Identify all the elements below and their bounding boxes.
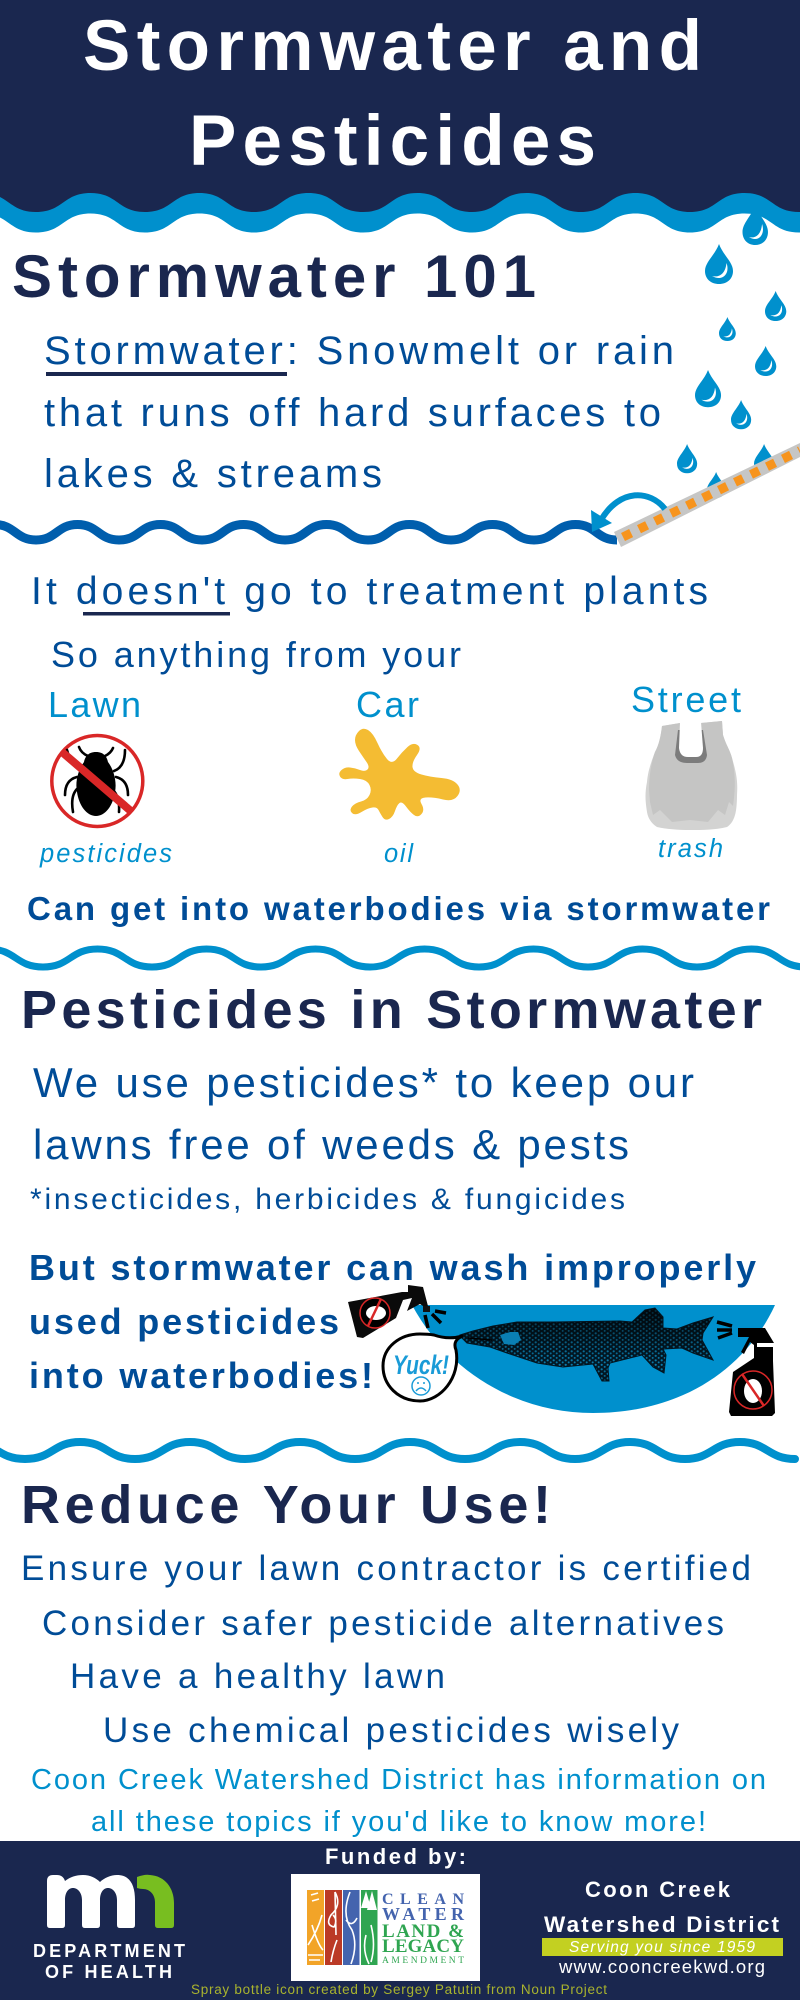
text: more information xyxy=(31,1764,766,1838)
panel: car oil xyxy=(339,684,460,868)
logo: Clean Water Land and Legacy Amendment: AMENDMENT xyxy=(382,1956,464,1966)
speech bubble: yuck xyxy=(383,1334,463,1401)
speech bubble: yuck: Yuck! xyxy=(393,1350,449,1380)
panel: street trash: trash xyxy=(658,835,723,863)
title line 2: Pesticides xyxy=(189,102,596,181)
text: can get into waterbodies: Can get into waterbodies via stormwater xyxy=(27,890,770,927)
logo: Coon Creek Watershed District: www.cooncreekwd.org xyxy=(558,1956,765,1977)
list: actions: Use chemical pesticides wisely xyxy=(103,1711,680,1750)
list: actions: Ensure your lawn contractor is certified xyxy=(21,1549,751,1588)
text block: pesticide use: lawns free of weeds & pests xyxy=(33,1121,629,1168)
icon: rain drops xyxy=(677,205,786,498)
text: icon credit: Spray bottle icon created by Sergey Patutin from Noun Project xyxy=(191,1982,607,1997)
logo: Minnesota Department of Health: OF HEALTH xyxy=(45,1962,172,1982)
list: actions: Consider safer pesticide alternatives xyxy=(42,1604,724,1643)
text: funded by: Funded by: xyxy=(325,1844,466,1869)
logo: Clean Water Land and Legacy Amendment: WATER xyxy=(382,1904,465,1924)
panel: lawn pesticides xyxy=(39,684,172,868)
logo: Clean Water Land and Legacy Amendment: LAND & xyxy=(382,1921,464,1942)
text block: stormwater washes pesticides: into waterbodies! xyxy=(29,1355,373,1396)
panel: lawn pesticides: Lawn xyxy=(48,684,141,725)
illustration: fish in polluted water xyxy=(348,1285,775,1416)
text block: stormwater definition: lakes & streams xyxy=(44,452,382,496)
logo: Clean Water Land and Legacy Amendment: CLEAN xyxy=(382,1891,464,1908)
logo: Clean Water Land and Legacy Amendment: LEGACY xyxy=(382,1936,464,1957)
logo: Minnesota Department of Health: DEPARTMENT xyxy=(33,1941,185,1961)
text block: stormwater definition xyxy=(44,329,674,496)
text block: stormwater washes pesticides: used pesticides xyxy=(29,1301,339,1342)
text: it doesn't go to treatment plants: It doesn't go to treatment plants xyxy=(31,570,708,613)
text: more information: all these topics if you'd like to know more! xyxy=(91,1806,706,1838)
heading: reduce your use: Reduce Your Use! xyxy=(21,1475,551,1535)
arrow: runoff flows off street xyxy=(591,495,665,532)
text block: pesticide use: We use pesticides* to keep our xyxy=(33,1059,694,1106)
wave divider 3 xyxy=(0,1442,795,1459)
logo: Coon Creek Watershed District: Coon Creek xyxy=(585,1877,731,1902)
icon: right spray bottle xyxy=(717,1322,775,1416)
logo: Coon Creek Watershed District: Serving you since 1959 xyxy=(569,1939,755,1956)
water xyxy=(412,1305,775,1413)
panel: street trash: Street xyxy=(631,679,741,720)
logo: Coon Creek Watershed District: Watershed District xyxy=(544,1912,780,1937)
panel: car oil: oil xyxy=(384,840,414,868)
text block: stormwater definition: that runs off hard surfaces to xyxy=(44,391,661,435)
list: actions: Have a healthy lawn xyxy=(70,1657,445,1696)
wave divider 2 xyxy=(0,949,800,967)
text block: pesticide use xyxy=(30,1059,694,1216)
icon: fish xyxy=(460,1308,713,1381)
text block: stormwater definition: Stormwater: Snowmelt or rain xyxy=(44,329,674,373)
panel: car oil: Car xyxy=(356,684,419,725)
icon: street strip xyxy=(614,443,800,547)
text block: pesticide use: *insecticides, herbicides & fungicides xyxy=(30,1183,625,1216)
heading: pesticides in stormwater: Pesticides in Stormwater xyxy=(21,980,762,1040)
text block: stormwater washes pesticides xyxy=(29,1247,756,1396)
footer xyxy=(0,1841,800,2000)
text: more information: Coon Creek Watershed District has information on xyxy=(31,1764,766,1796)
icon: no bug sign xyxy=(52,736,143,826)
wave divider with street and runoff arrow xyxy=(0,443,800,547)
logo: Minnesota Department of Health xyxy=(33,1875,185,1982)
logo: Clean Water Land and Legacy Amendment xyxy=(291,1874,480,1981)
title line 1: Stormwater and xyxy=(83,7,702,86)
heading: Stormwater 101: Stormwater 101 xyxy=(12,243,536,310)
text: so anything from your: So anything from your xyxy=(51,634,461,675)
panel: street trash xyxy=(631,679,741,863)
icon: left spray bottle xyxy=(348,1285,446,1338)
icon: oil splat xyxy=(339,729,460,820)
list: actions xyxy=(21,1549,751,1750)
panel: lawn pesticides: pesticides xyxy=(39,840,172,868)
text block: stormwater washes pesticides: But stormwater can wash improperly xyxy=(29,1247,756,1288)
header banner with title xyxy=(0,0,800,232)
logo: Coon Creek Watershed District xyxy=(542,1877,783,1977)
icon: plastic bag xyxy=(646,721,737,830)
